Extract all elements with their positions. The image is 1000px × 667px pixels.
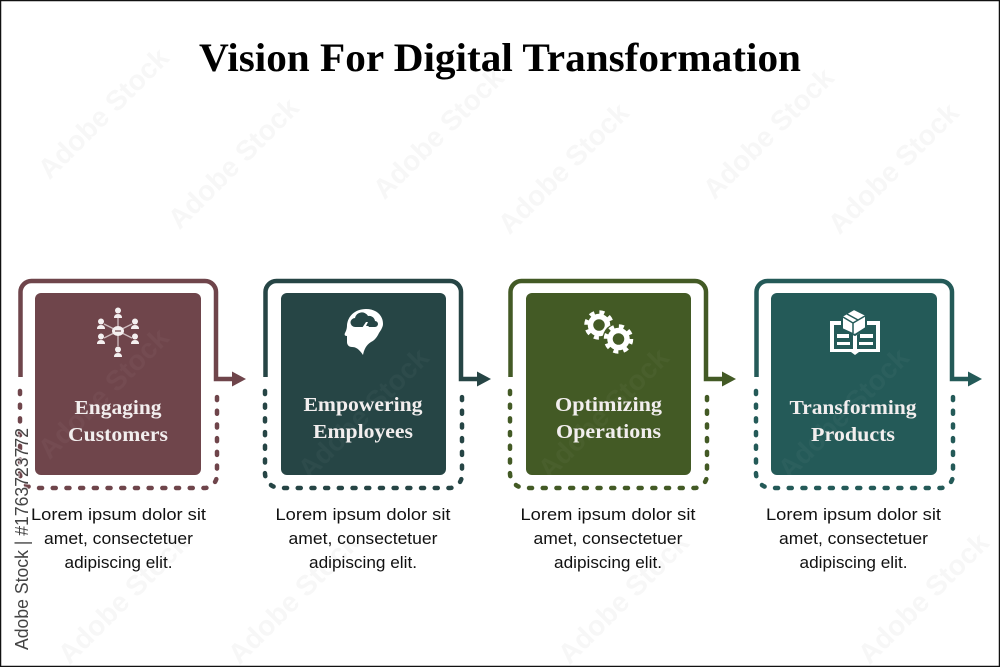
text: Adobe Stock [852, 527, 995, 667]
description: amet, consectetuer [779, 529, 928, 548]
heading: Empowering [304, 394, 422, 416]
text: Adobe Stock [32, 42, 175, 185]
panel: engaging customers [20, 281, 246, 572]
dashed frame [510, 391, 707, 488]
heading: Operations [556, 421, 661, 443]
card background [771, 293, 937, 475]
description: Lorem ipsum dolor sit [31, 505, 206, 524]
heading [304, 394, 422, 443]
text: Adobe Stock [492, 97, 635, 240]
dashed frame [756, 391, 953, 488]
dashed frame [265, 391, 462, 488]
panel: transforming products [756, 281, 982, 572]
text: Adobe Stock [367, 62, 510, 205]
heading [555, 394, 662, 443]
description: amet, consectetuer [288, 529, 438, 548]
description [31, 505, 206, 572]
heading [68, 397, 168, 446]
stock id label: Adobe Stock | #1763723772 [12, 428, 32, 650]
panel: optimizing operations [510, 281, 736, 572]
text: Adobe Stock [532, 342, 675, 485]
description [766, 505, 941, 572]
card background [526, 293, 691, 475]
text: Adobe Stock [552, 527, 695, 667]
description: adipiscing elit. [554, 553, 662, 572]
description: adipiscing elit. [309, 553, 417, 572]
solid frame arrow [510, 281, 736, 386]
text: Adobe Stock [772, 342, 915, 485]
heading: Employees [313, 421, 413, 443]
heading: Products [811, 424, 895, 446]
title: Vision For Digital Transformation [199, 35, 801, 80]
description: amet, consectetuer [534, 529, 683, 548]
card background [35, 293, 201, 475]
description: Lorem ipsum dolor sit [276, 505, 451, 524]
text: Adobe Stock [162, 92, 305, 235]
dashed frame [20, 391, 217, 488]
text: Adobe Stock [222, 527, 365, 667]
text: Adobe Stock [697, 62, 840, 205]
panel: empowering employees [265, 281, 491, 572]
description: amet, consectetuer [44, 529, 193, 548]
icon: connected people [97, 308, 139, 357]
text: Adobe Stock [822, 97, 965, 240]
description: Lorem ipsum dolor sit [520, 505, 696, 524]
description: adipiscing elit. [64, 553, 172, 572]
heading [790, 397, 916, 446]
description: Lorem ipsum dolor sit [766, 505, 941, 524]
card background [281, 293, 446, 475]
description [276, 505, 451, 572]
text: Adobe Stock [52, 527, 195, 667]
description [520, 505, 696, 572]
icon: head with brain cloud [345, 309, 383, 355]
heading: Engaging [74, 397, 162, 419]
icon: book with box [830, 309, 880, 355]
solid frame arrow [756, 281, 982, 386]
heading: Optimizing [555, 394, 662, 416]
icon: gears [586, 312, 634, 355]
solid frame arrow [266, 281, 491, 386]
solid frame arrow [20, 281, 246, 386]
heading: Transforming [790, 397, 916, 419]
text: Adobe Stock [292, 342, 435, 485]
text: Adobe Stock [32, 322, 175, 465]
heading: Customers [68, 424, 168, 446]
description: adipiscing elit. [800, 553, 908, 572]
